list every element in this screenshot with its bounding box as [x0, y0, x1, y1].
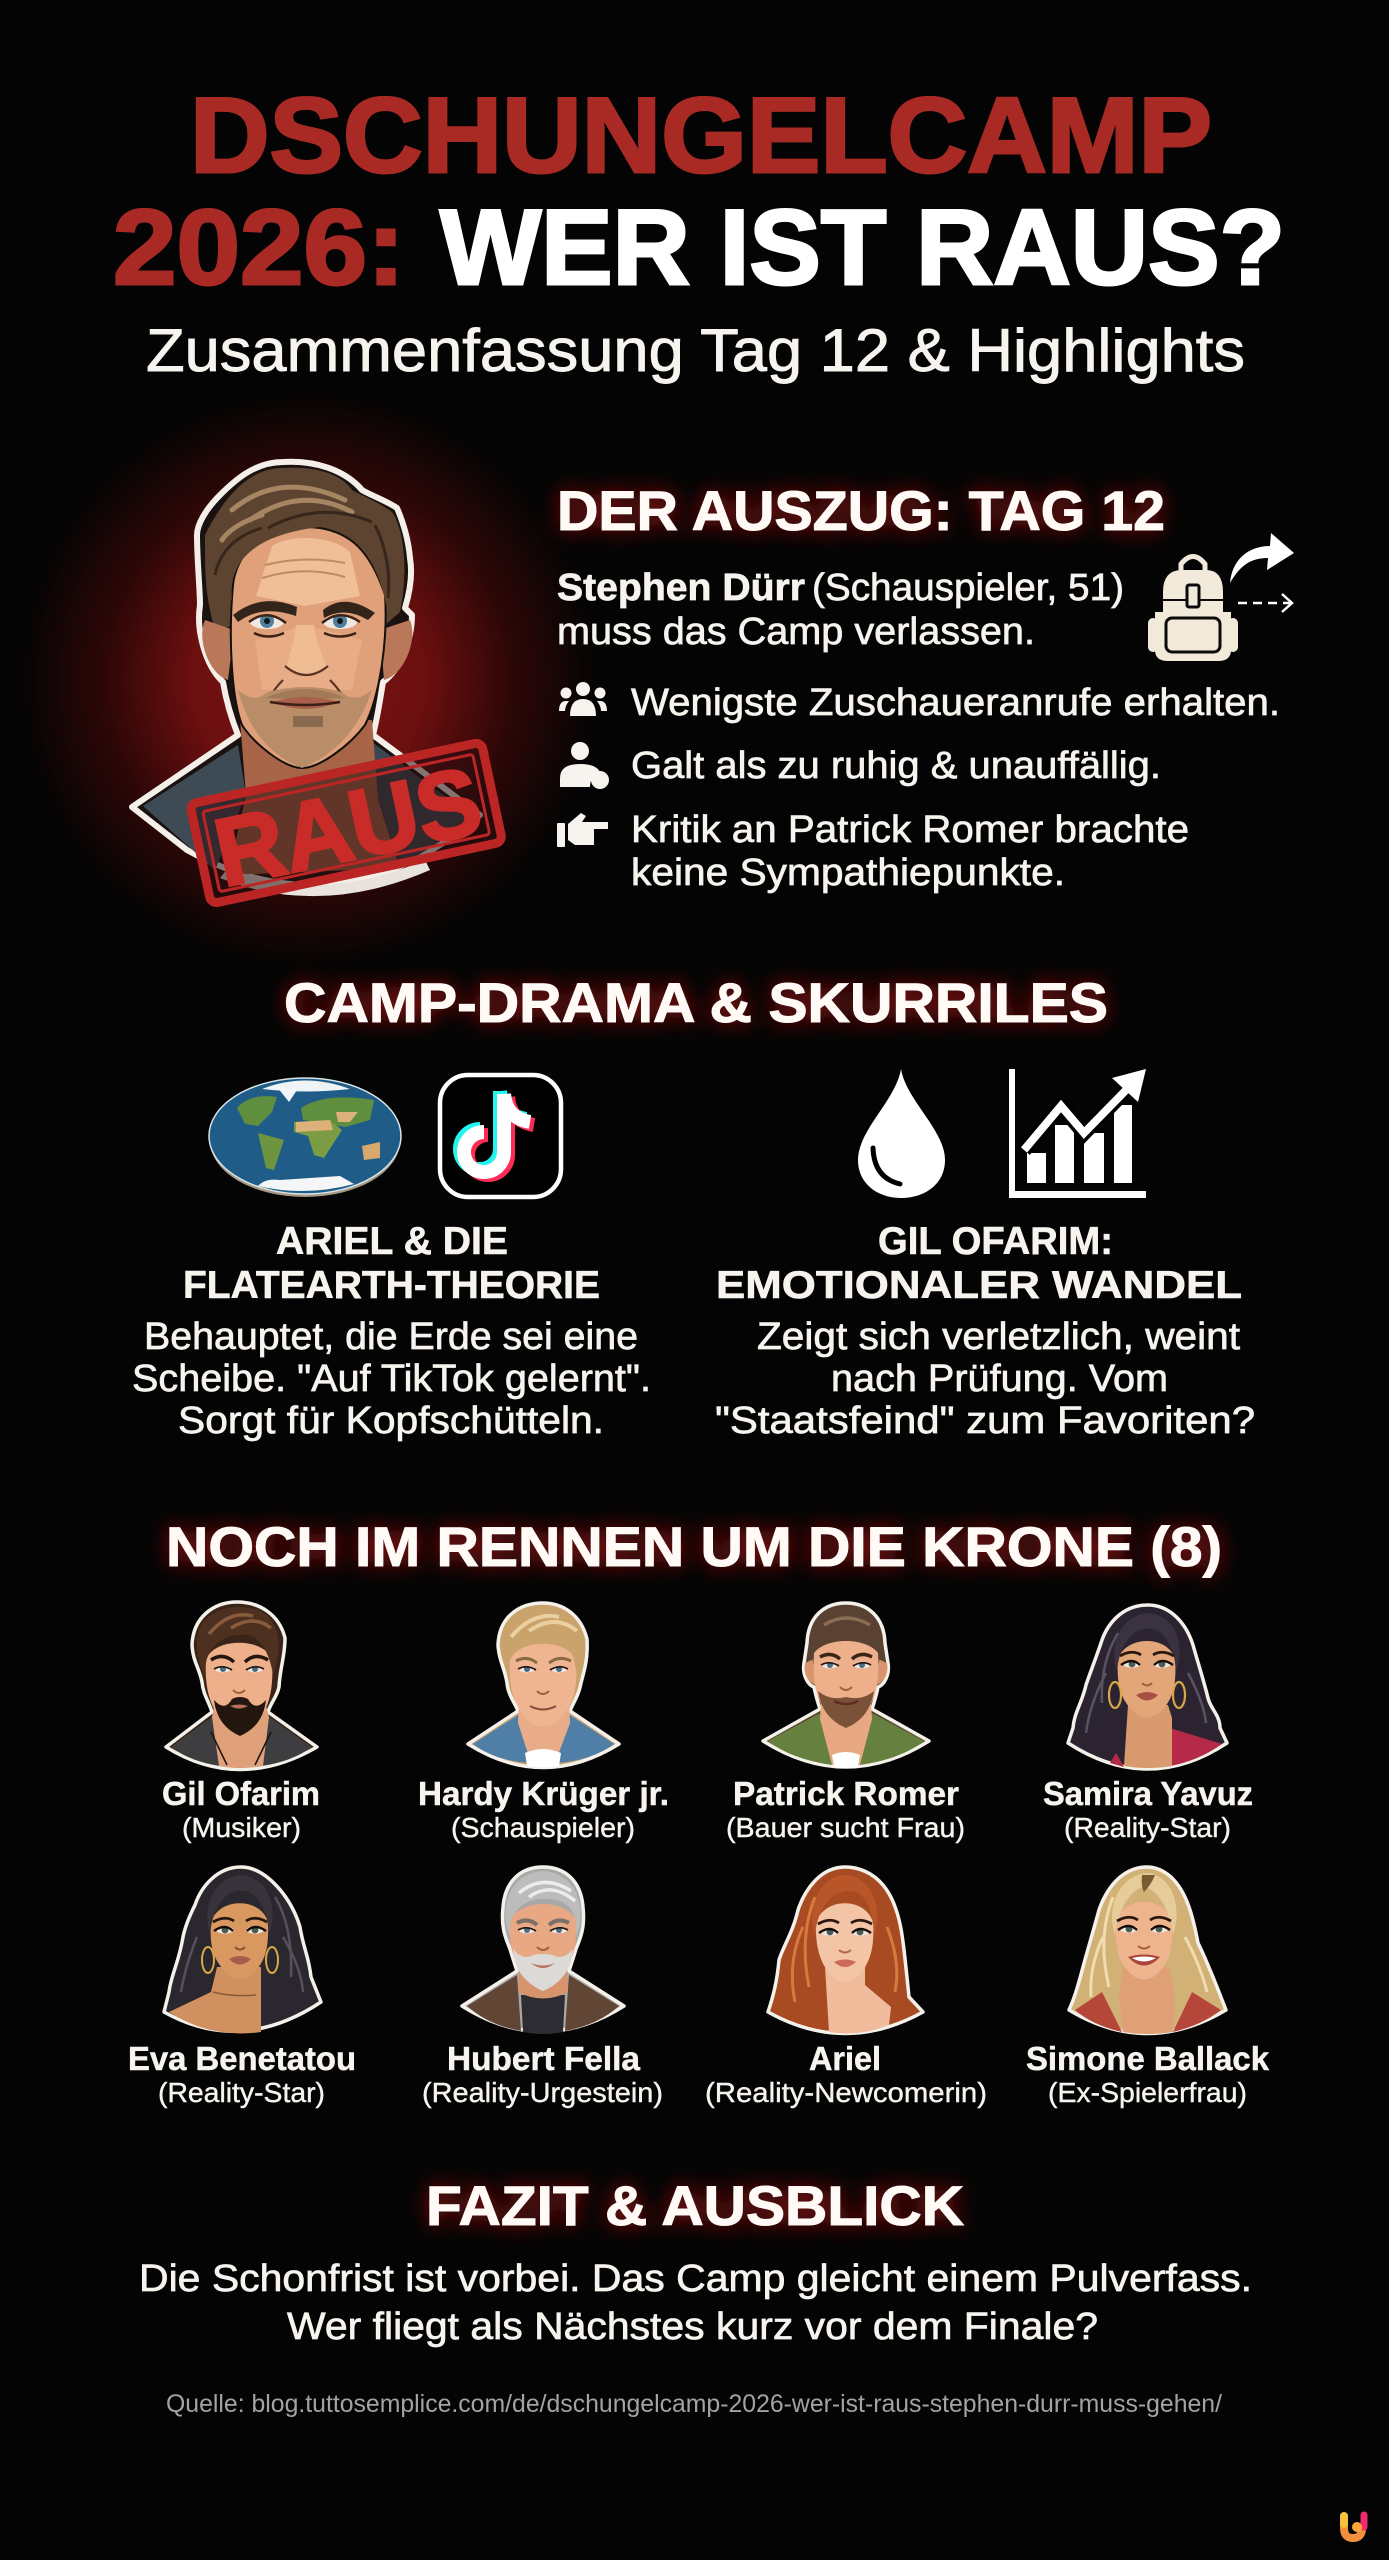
role: (Reality-Urgestein) [422, 2077, 663, 2108]
title: 2026: [113, 187, 405, 307]
heading: gil: EMOTIONALER WANDEL [716, 1264, 1242, 1307]
hair back [205, 468, 404, 630]
text block: gil: nach Prüfung. Vom [831, 1358, 1168, 1400]
text block: gil: Zeigt sich verletzlich, weint [757, 1316, 1240, 1358]
bullet: calls: Wenigste Zuschaueranrufe erhalten. [631, 682, 1280, 724]
text block: muss das Camp verlassen. [557, 611, 1035, 653]
heading: fazit: FAZIT & AUSBLICK [426, 2174, 964, 2237]
name: Hardy Krüger jr. [418, 1775, 669, 1812]
chest [228, 720, 400, 875]
face [231, 527, 386, 768]
card: patrick romer [726, 1603, 965, 1843]
subtitle: Zusammenfassung Tag 12 & Highlights [146, 317, 1245, 384]
portrait: samira [1068, 1605, 1227, 1769]
title: WER IST RAUS? [440, 187, 1285, 307]
red glow [18, 390, 598, 970]
text block: fazit [139, 2258, 1252, 2348]
text block [557, 567, 1124, 653]
heading: DER AUSZUG: TAG 12 [557, 479, 1165, 542]
panel: der auszug portrait [18, 390, 598, 970]
portrait: ariel [768, 1867, 923, 2034]
forehead light [256, 538, 360, 606]
text block: ariel: Behauptet, die Erde sei eine [144, 1316, 638, 1358]
panel: ariel [132, 1075, 651, 1442]
panel: gil [715, 1069, 1255, 1442]
icon: rising chart [1009, 1069, 1146, 1198]
title: DSCHUNGELCAMP [190, 75, 1212, 195]
bullet: criticism [557, 809, 1189, 894]
text block: gil [715, 1316, 1255, 1442]
heading: gil [716, 1220, 1242, 1307]
heading: camp-drama: CAMP-DRAMA & SKURRILES [284, 971, 1108, 1034]
text block: (Schauspieler, 51) [812, 567, 1124, 609]
card: simone ballack [1026, 1867, 1270, 2108]
name: Hubert Fella [447, 2040, 641, 2077]
arrow: dashed exit [1238, 594, 1292, 612]
source: Quelle: blog.tuttosemplice.com/de/dschungelcamp-2026-wer-ist-raus-stephen-durr-muss-gehen/ [166, 2390, 1222, 2418]
eyes [250, 615, 284, 629]
heading: ariel [183, 1220, 600, 1307]
nose [286, 625, 327, 675]
name: Simone Ballack [1026, 2040, 1270, 2077]
role: (Schauspieler) [451, 1812, 635, 1843]
stamp: raus: RAUS [206, 747, 490, 907]
card: ariel [705, 1867, 987, 2108]
icon: person with coin [560, 742, 609, 789]
text block: ariel: Sorgt für Kopfschütteln. [178, 1400, 604, 1442]
card: hubert fella [422, 1867, 663, 2108]
text block: gil: "Staatsfeind" zum Favoriten? [715, 1400, 1255, 1442]
jacket [143, 745, 246, 870]
card: hardy krueger jr. [418, 1603, 669, 1843]
title [113, 75, 1285, 307]
card: eva benetatou [128, 1867, 356, 2108]
portrait: patrick [763, 1603, 929, 1768]
text block: ariel [132, 1316, 651, 1442]
name: Samira Yavuz [1043, 1775, 1253, 1812]
text block: Stephen Dürr [557, 567, 805, 609]
arrow: curved exit [1230, 533, 1294, 583]
heading: gil: GIL OFARIM: [878, 1220, 1113, 1263]
icon: people [559, 682, 607, 716]
portrait: gil ofarim [166, 1602, 317, 1770]
portrait: simone [1069, 1867, 1226, 2034]
portrait: hubert [462, 1867, 624, 2034]
icon: flat earth [209, 1078, 401, 1197]
icon: backpack [1148, 556, 1238, 661]
panel: der auszug text [557, 479, 1294, 894]
heading: noch im rennen: NOCH IM RENNEN UM DIE KRONE (8) [166, 1515, 1222, 1578]
name: Eva Benetatou [128, 2040, 356, 2077]
role: (Musiker) [182, 1812, 301, 1843]
icon: tear drop [858, 1069, 945, 1198]
mouth [272, 697, 338, 709]
text block: ariel: Scheibe. "Auf TikTok gelernt". [132, 1358, 651, 1400]
card: gil ofarim [162, 1602, 320, 1843]
brows [233, 601, 375, 622]
icon: logo [1344, 2515, 1364, 2538]
stubble [238, 687, 372, 768]
ears [202, 620, 234, 680]
role: (Ex-Spielerfrau) [1048, 2077, 1247, 2108]
bullet: criticism: Kritik an Patrick Romer brachte [631, 809, 1189, 851]
silhouette [132, 462, 480, 885]
heading: ariel: ARIEL & DIE [276, 1220, 508, 1263]
name: Ariel [809, 2040, 881, 2077]
name: Patrick Romer [733, 1775, 959, 1812]
role: (Reality-Star) [1064, 1812, 1231, 1843]
name: Gil Ofarim [162, 1775, 320, 1812]
text block: fazit: Wer fliegt als Nächstes kurz vor dem Finale? [287, 2306, 1098, 2348]
role: (Bauer sucht Frau) [726, 1812, 965, 1843]
portrait: hardy [468, 1603, 619, 1768]
icon: pointing hand [557, 813, 608, 847]
icon: tiktok [440, 1075, 561, 1197]
text block: fazit: Die Schonfrist ist vorbei. Das Camp gleicht einem Pulverfass. [139, 2258, 1252, 2300]
hair front [209, 470, 394, 605]
portrait: eva [164, 1867, 321, 2033]
role: (Reality-Star) [158, 2077, 325, 2108]
bullet: quiet: Galt als zu ruhig & unauffällig. [631, 745, 1161, 787]
heading: ariel: FLATEARTH-THEORIE [183, 1264, 600, 1307]
card: samira yavuz [1043, 1605, 1253, 1843]
role: (Reality-Newcomerin) [705, 2077, 987, 2108]
bullet: criticism: keine Sympathiepunkte. [631, 852, 1065, 894]
